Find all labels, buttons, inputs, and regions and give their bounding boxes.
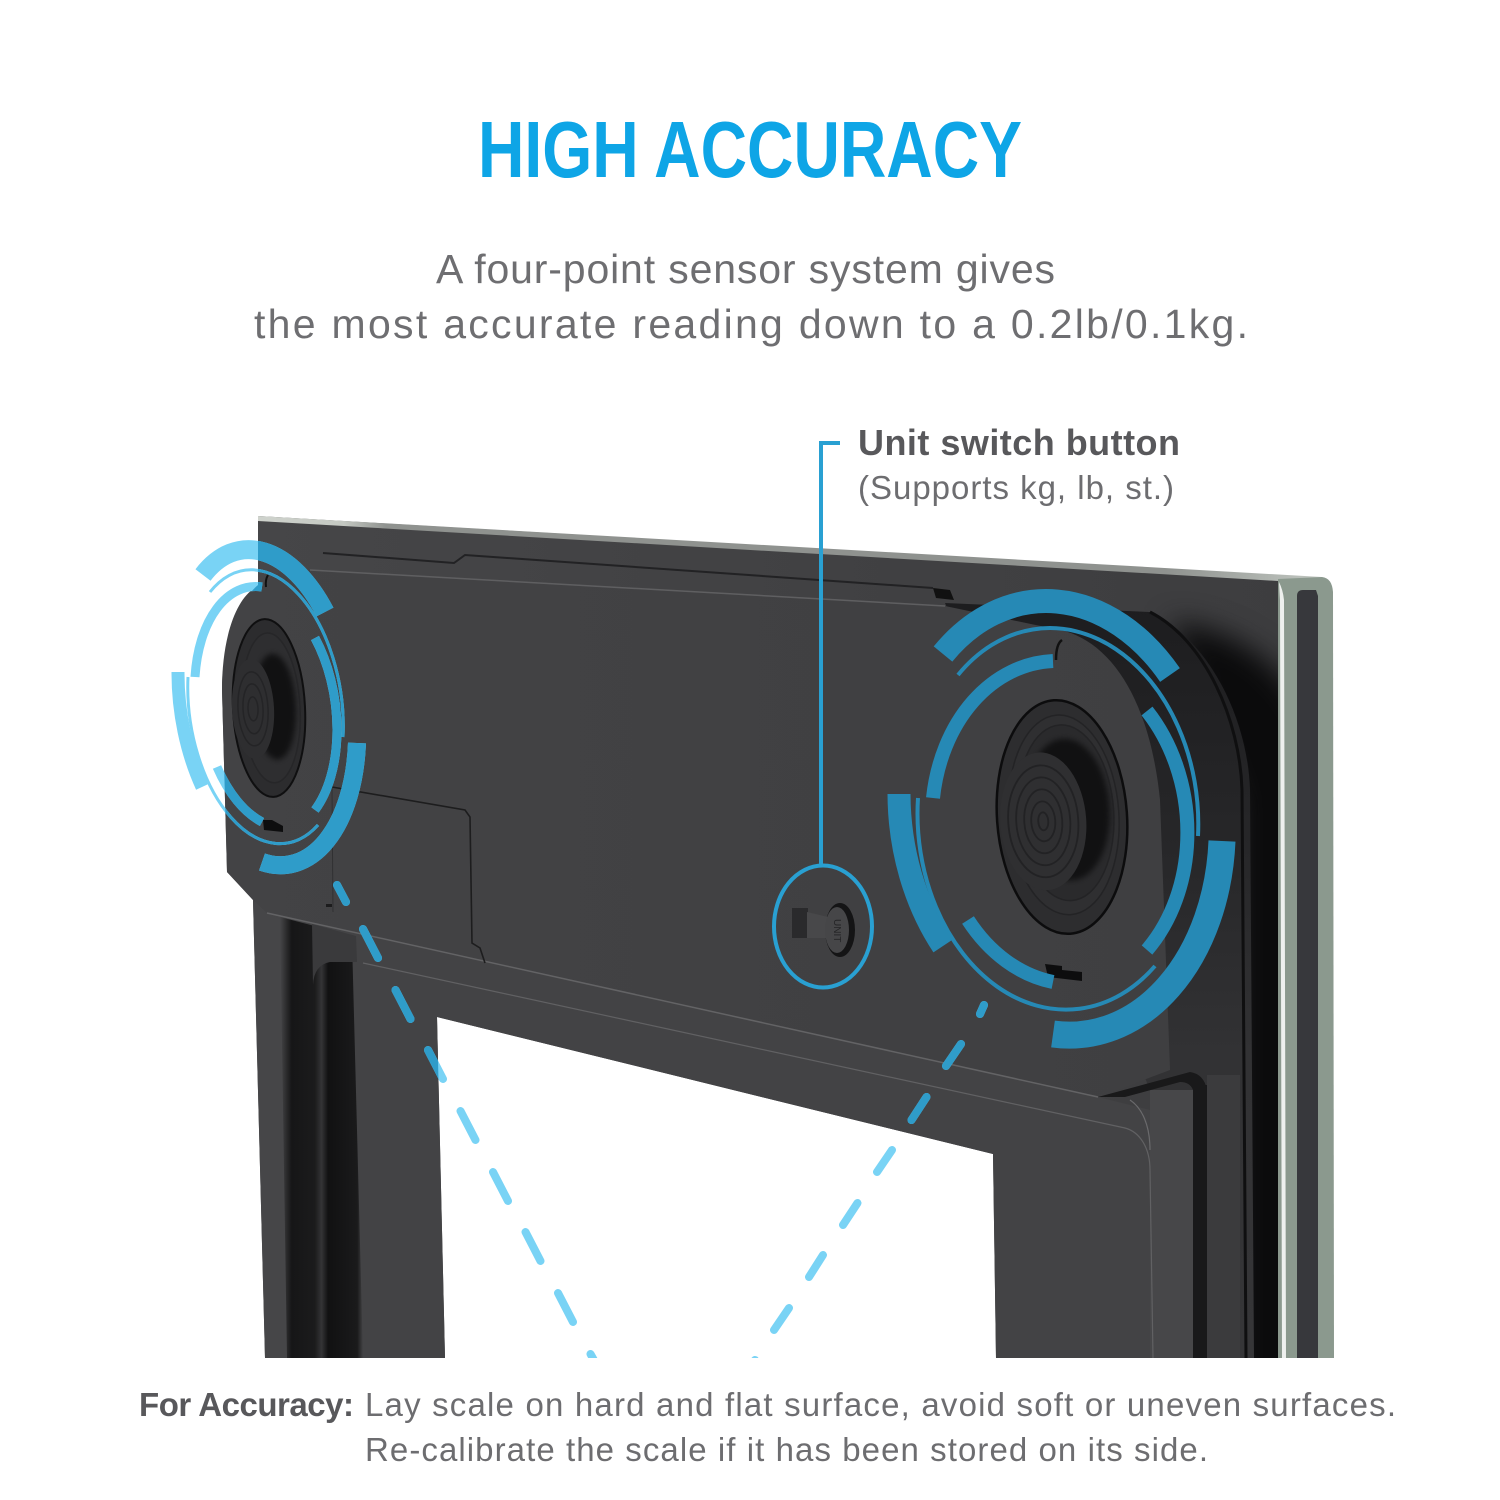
right sensor marks: [1045, 640, 1082, 981]
frame step wedge: [1098, 1072, 1207, 1097]
dashes over white: [337, 885, 984, 1364]
left sensor foot: [227, 617, 310, 799]
right black shadow: [1168, 613, 1278, 1358]
battery door: [332, 787, 485, 963]
callout: unit switch leader: [774, 443, 872, 988]
title: HIGH ACCURACY: [478, 105, 1022, 194]
dashes over body: [333, 881, 988, 1124]
left frame grooves: [280, 917, 363, 1358]
unit switch: UNIT: [831, 919, 842, 942]
subtitle: [254, 246, 1248, 347]
footer note: Re-calibrate the scale if it has been stored on its side.: [365, 1431, 1208, 1468]
unit switch label: Unit switch button: [858, 422, 1180, 463]
plate and frame lines: [267, 553, 1153, 1358]
unit switch: [792, 903, 855, 957]
band rim lines: [1150, 612, 1246, 1358]
glass side edge: [1278, 577, 1334, 1358]
left frame band: [253, 901, 265, 1357]
lobe dark band: [945, 603, 1254, 1358]
subtitle: A four-point sensor system gives: [436, 246, 1055, 292]
upper frame corner above inner groove: [312, 924, 357, 985]
unit switch label: [858, 422, 1180, 506]
footer note: For Accuracy:: [139, 1386, 354, 1423]
dashed sensor lines: [337, 885, 984, 1364]
footer note: [139, 1386, 1396, 1468]
scale photo: [222, 516, 1334, 1420]
subtitle: the most accurate reading down to a 0.2lb/0.1kg.: [254, 301, 1248, 347]
window frame panel: [437, 1017, 996, 1358]
scale body: [222, 516, 1300, 1358]
left sensor marks: [263, 575, 332, 907]
main plate: [222, 569, 1170, 1097]
door seam: [332, 787, 333, 912]
right sensor foot: [995, 699, 1129, 935]
glass top edge: [258, 516, 1326, 584]
right sensor rings: [899, 601, 1222, 1035]
footer note: Lay scale on hard and flat surface, avoid soft or uneven surfaces.: [365, 1386, 1396, 1423]
left sensor rings: [178, 550, 357, 865]
unit switch label: (Supports kg, lb, st.): [858, 469, 1174, 506]
right frame columns: [1150, 1075, 1240, 1360]
